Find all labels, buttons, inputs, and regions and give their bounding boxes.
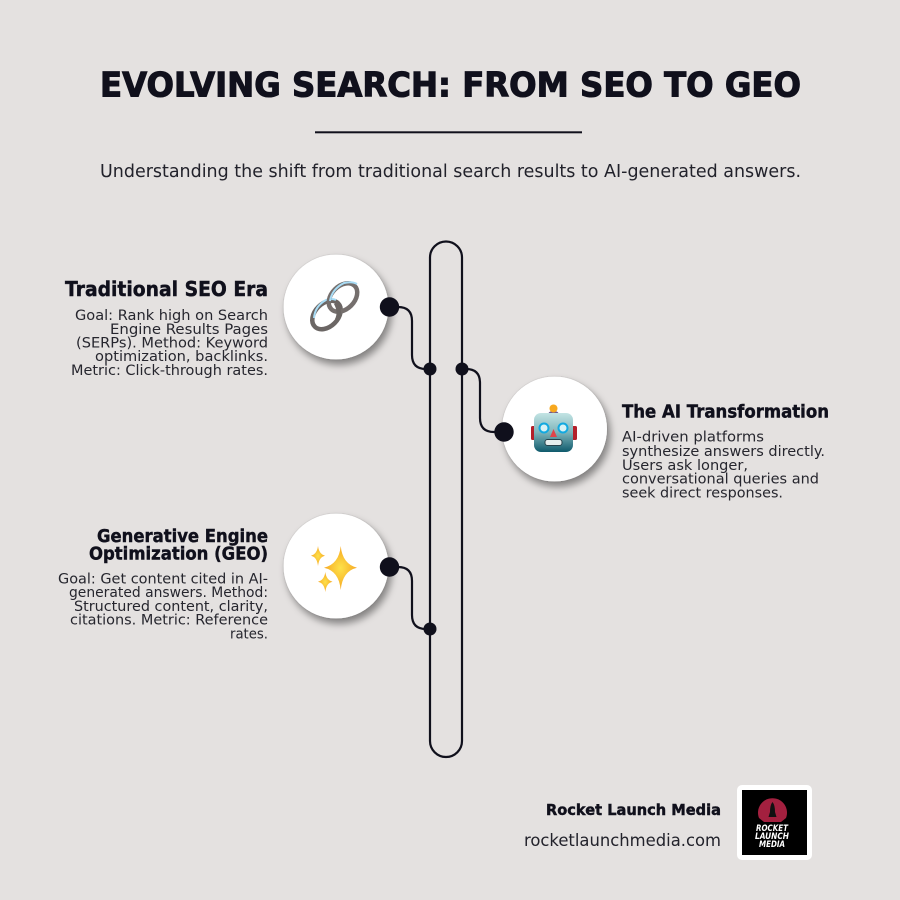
text block: AI description: synthesize answers directly. (622, 443, 825, 460)
track node: SEO (424, 362, 436, 376)
text block: SEO description (71, 307, 268, 379)
icon: robot (502, 376, 607, 482)
heading: traditional SEO era: Traditional SEO Era (65, 277, 268, 301)
connector node: AI (494, 422, 514, 442)
text block: GEO description (58, 570, 268, 642)
text block: SEO description: Engine Results Pages (110, 321, 268, 338)
logo: Rocket Launch Media: MEDIA (759, 840, 785, 850)
connector node: GEO (380, 557, 399, 577)
panel: traditional SEO era (65, 254, 436, 379)
logo: Rocket Launch Media: LAUNCH (755, 832, 789, 842)
subtitle: Understanding the shift from traditional search results to AI-generated answers. (100, 161, 801, 182)
text block: GEO description: citations. Metric: Reference (70, 612, 268, 628)
logo: Rocket Launch Media: ROCKET (756, 824, 789, 834)
footer website: rocketlaunchmedia.com (524, 831, 721, 850)
text block: AI description: AI-driven platforms (622, 429, 764, 446)
text block: GEO description: Structured content, clarity, (74, 598, 268, 615)
text block: AI description: Users ask longer, (622, 457, 748, 474)
text block: GEO description: Goal: Get content cited in AI- (58, 570, 268, 588)
text block: SEO description: Goal: Rank high on Search (75, 307, 268, 324)
heading: generative engine optimization: Optimization (GEO) (89, 544, 268, 564)
panel: generative engine optimization (58, 514, 436, 642)
title: EVOLVING SEARCH: FROM SEO TO GEO (100, 66, 801, 106)
footer brand name: Rocket Launch Media (546, 801, 721, 819)
icon: chain link (284, 254, 388, 360)
heading: generative engine optimization: Generative Engine (97, 526, 268, 547)
text block: AI description: conversational queries and (622, 470, 819, 488)
text block: SEO description: optimization, backlinks. (95, 348, 268, 365)
timeline track (390, 242, 504, 757)
text block: GEO description: rates. (230, 626, 268, 642)
icon: sparkles (284, 514, 388, 618)
text block: SEO description: (SERPs). Method: Keyword (76, 334, 268, 352)
text block: AI description: seek direct responses. (622, 484, 783, 502)
heading: the AI transformation: The AI Transformation (622, 402, 829, 423)
text block: SEO description: Metric: Click-through rates. (71, 362, 268, 379)
text block: AI description (622, 429, 825, 502)
text block: GEO description: generated answers. Method: (69, 584, 268, 601)
track node: GEO (424, 622, 436, 636)
connector node: SEO (380, 297, 399, 317)
track node: AI (456, 362, 468, 376)
heading: generative engine optimization (89, 526, 268, 564)
panel: the AI transformation (456, 362, 829, 502)
logo: Rocket Launch Media (737, 785, 812, 860)
